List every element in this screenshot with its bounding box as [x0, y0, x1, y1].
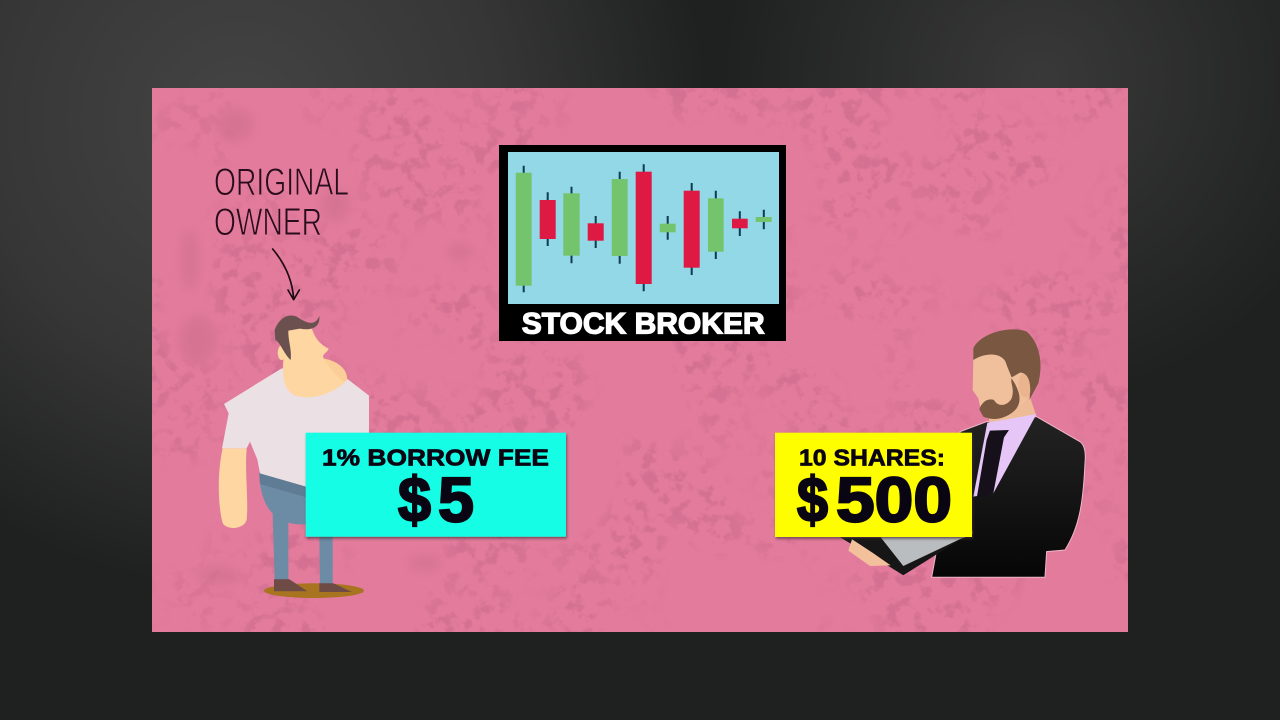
- callout: share value: [775, 433, 972, 537]
- tie: [977, 430, 1009, 498]
- beard: [979, 378, 1020, 419]
- arm: [219, 448, 247, 528]
- handwritten label: original owner: [214, 161, 349, 244]
- shirt: [222, 368, 369, 487]
- arrow: label to owner: [273, 249, 299, 300]
- dress shirt: [973, 414, 1037, 497]
- head and neck: [283, 328, 347, 397]
- hair: [275, 316, 319, 360]
- sign label: STOCK BROKER: [522, 307, 765, 340]
- candlestick chart: [516, 164, 772, 292]
- suit: [932, 417, 1085, 577]
- ear: [1018, 373, 1032, 397]
- chin shade: [324, 359, 347, 381]
- neck: [987, 387, 1036, 428]
- callout value: $: [398, 466, 431, 536]
- chart screen: [508, 152, 779, 304]
- callout heading: 10 SHARES:: [799, 445, 945, 471]
- stock broker sign: [499, 145, 786, 341]
- callout heading: 1% BORROW FEE: [322, 445, 549, 471]
- jeans: [259, 473, 333, 584]
- callout value: [797, 466, 952, 536]
- callout: borrow fee: [306, 433, 566, 537]
- figure: original owner: [219, 316, 369, 598]
- figure: businessman with laptop: [840, 329, 1085, 577]
- ground shadow: [264, 583, 364, 598]
- ear: [278, 345, 286, 360]
- panel: distressed pink background: [152, 88, 1128, 632]
- hand: [848, 539, 891, 566]
- sign frame: [499, 145, 786, 341]
- shoes: [274, 579, 352, 592]
- handwritten label: original owner: OWNER: [214, 201, 322, 244]
- callout value: $: [797, 466, 828, 536]
- handwritten label: original owner: ORIGINAL: [214, 161, 349, 204]
- face: [973, 344, 1028, 420]
- hair: [973, 329, 1041, 400]
- callout value: 5: [438, 466, 474, 536]
- callout value: 500: [836, 466, 952, 536]
- laptop: [840, 537, 964, 575]
- callout value: [398, 466, 474, 536]
